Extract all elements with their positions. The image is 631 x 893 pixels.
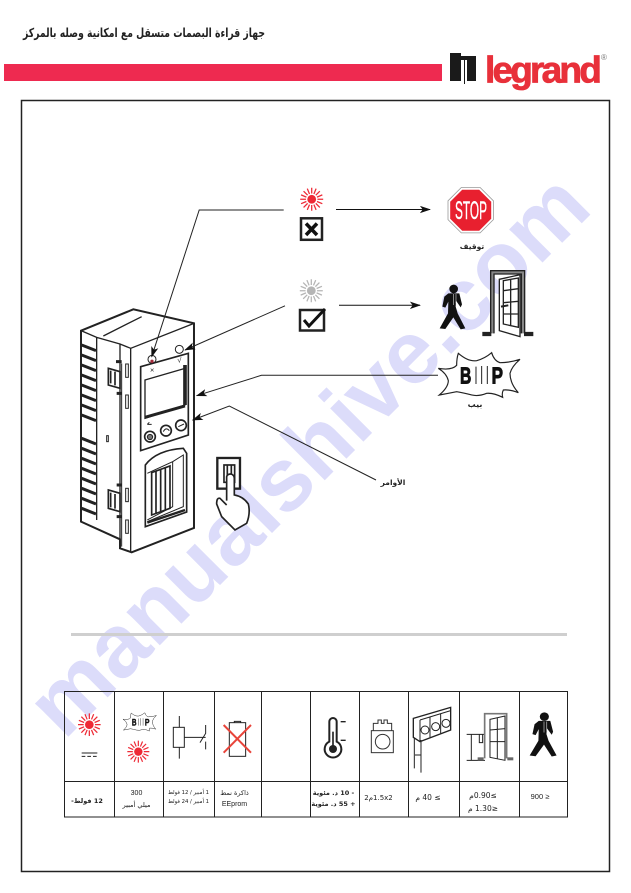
stop sign	[448, 188, 493, 233]
icon: red LED	[300, 188, 323, 211]
logo: legrand: ®	[601, 53, 607, 62]
icon: cross box	[301, 218, 322, 240]
icon: walking person	[440, 285, 465, 329]
watermark: manualshive.com	[7, 153, 608, 754]
text: relay rating: 1 أمبير / 24 فولط	[168, 797, 209, 805]
title: جهاز قراءة البصمات متسقل مع امكانية وصله بالمركز	[22, 25, 265, 40]
icon: crossed battery	[224, 721, 251, 756]
icon: beep and LED	[123, 713, 156, 763]
text: distance: ≥ 40 م	[415, 793, 441, 802]
callout arrow: green LED	[185, 306, 285, 350]
arrow to stop	[336, 208, 430, 210]
text: voltage: 12 فولط-	[71, 797, 103, 805]
label: stop: توقيف	[460, 242, 484, 251]
text: memory: ذاكرة نمط	[220, 789, 249, 797]
stop sign: STOP	[455, 197, 487, 225]
icon: door	[482, 271, 533, 337]
text: current	[122, 790, 150, 809]
device: fingerprint reader	[81, 309, 194, 552]
icon: check box	[300, 309, 325, 330]
icon: hand on fingerprint sensor	[217, 458, 249, 530]
text: width: 900 ≥	[531, 792, 549, 801]
text: memory: EEprom	[222, 801, 247, 808]
label: commands: الأوامر	[380, 478, 405, 487]
device: fingerprint reader: √	[177, 356, 182, 365]
callout arrow: beep	[197, 375, 438, 396]
icon: person	[530, 712, 557, 757]
text: temperature	[311, 789, 356, 808]
icon: beep	[438, 353, 520, 397]
icon: relay	[173, 716, 206, 759]
icon: terminal	[371, 720, 393, 753]
device: fingerprint reader: ×	[150, 366, 154, 375]
text: relay rating: 1 أمبير / 12 فولط	[168, 788, 209, 796]
text: height: ≥0.90م	[469, 791, 497, 800]
logo: legrand: legrand	[485, 50, 600, 90]
callout arrow: commands	[193, 406, 376, 480]
icon: wall box	[413, 707, 451, 773]
text: current: 300	[131, 790, 142, 797]
text: wire section: 1.5x2م2	[364, 794, 393, 802]
icon: LED and DC	[78, 713, 101, 756]
specifications table	[64, 692, 568, 817]
text: height: ≤1.30 م	[468, 804, 498, 813]
text: current: ميلي أمبير	[122, 800, 150, 809]
text: temperature: + 55 د. مئوية	[311, 800, 356, 808]
icon: grey LED	[300, 279, 323, 302]
arrow to person	[339, 304, 420, 306]
icon: thermometer	[325, 718, 346, 757]
text: memory	[220, 789, 249, 808]
red header bar	[4, 64, 442, 81]
icon: door height	[467, 714, 513, 760]
text: temperature: - 10 د. مئوية	[313, 789, 355, 797]
text: relay rating	[168, 788, 209, 805]
clips	[108, 368, 120, 388]
label: beep: بيب	[468, 400, 482, 409]
divider	[71, 633, 567, 636]
text: height	[468, 791, 498, 813]
callout arrow: red LED	[152, 210, 284, 357]
